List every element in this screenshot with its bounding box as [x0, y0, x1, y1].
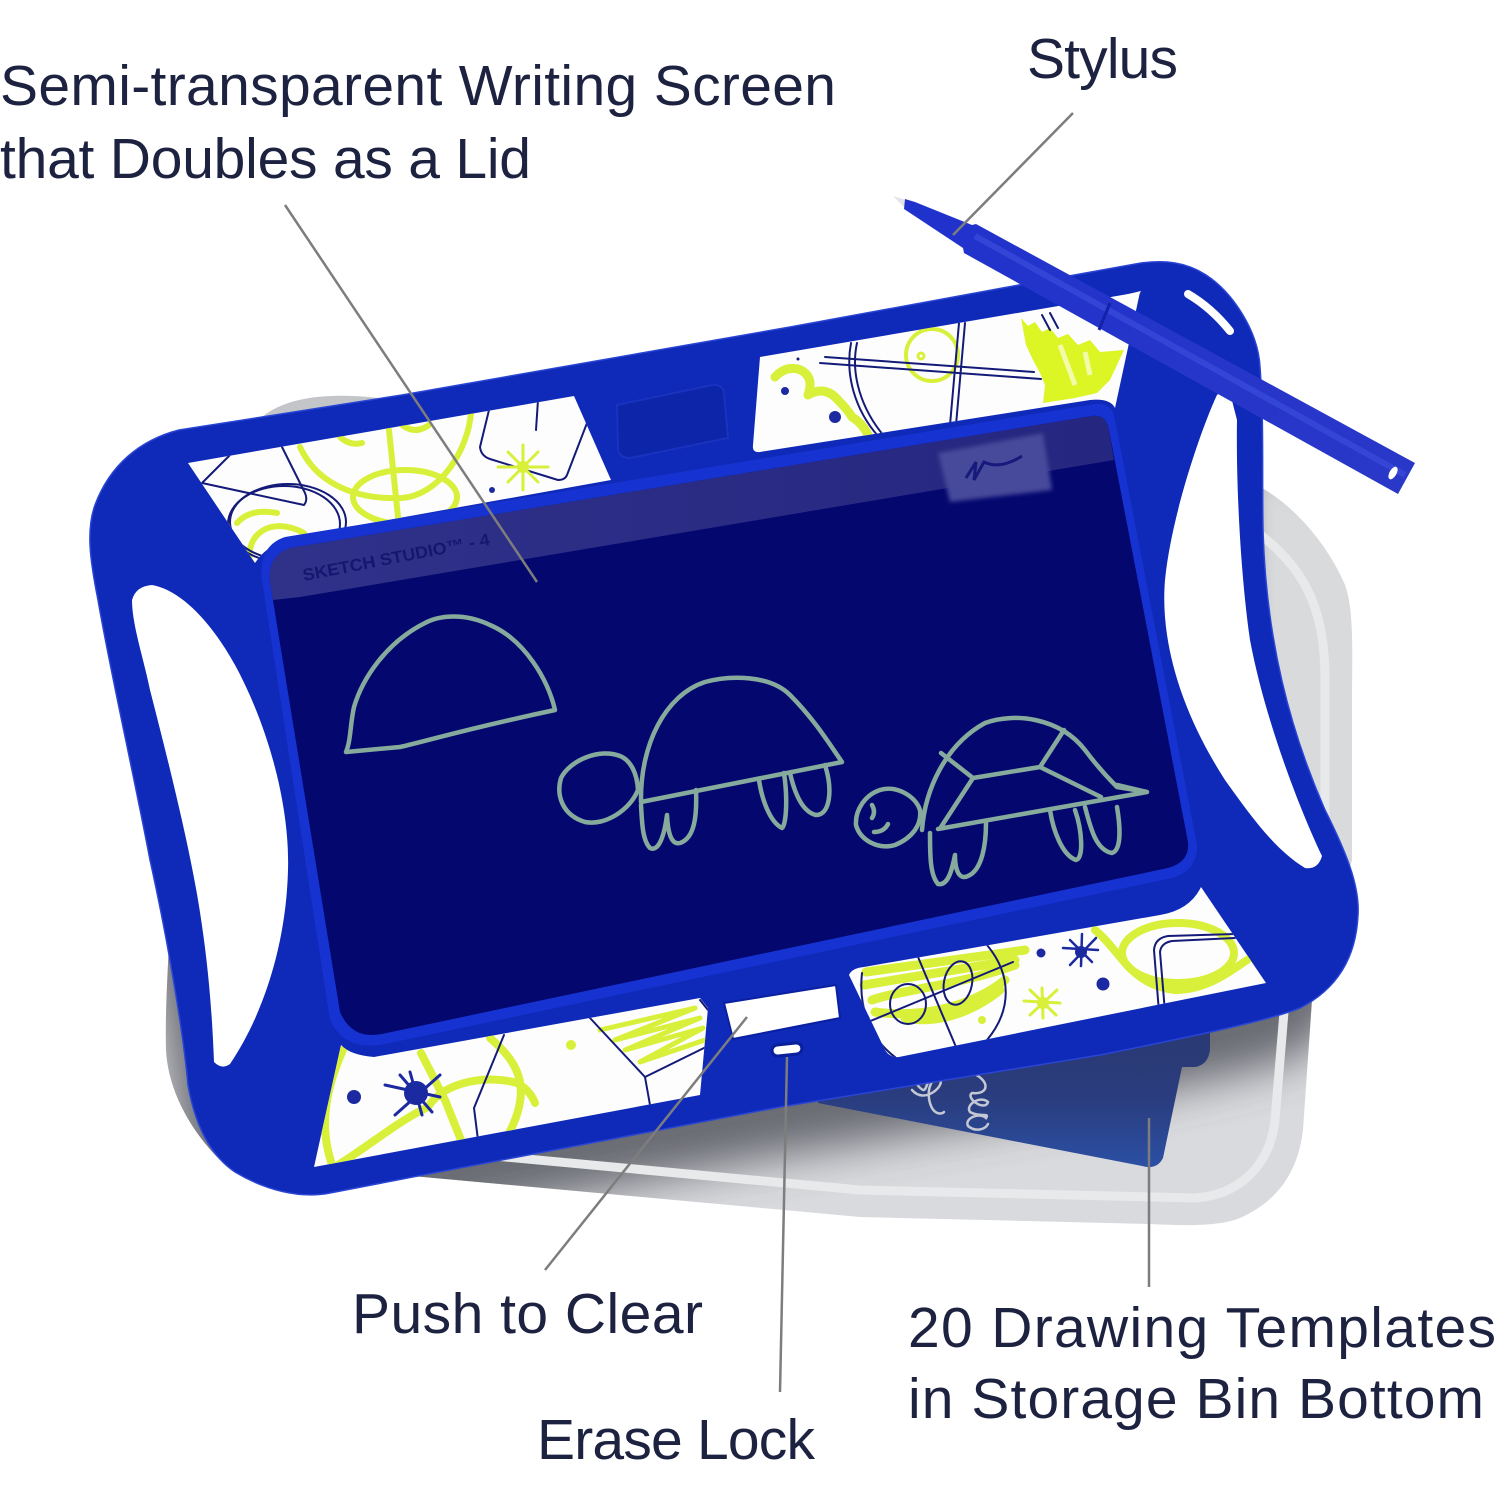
label: push to clear: Push to Clear — [352, 1282, 703, 1346]
panel: top right art — [753, 292, 1140, 452]
leader line: screen — [285, 205, 537, 582]
blue body — [90, 262, 1358, 1195]
erase lock switch — [771, 1042, 802, 1057]
stylus collar — [1099, 303, 1110, 330]
top translucent strip — [270, 416, 1114, 600]
white panel sliver under stylus — [1120, 291, 1141, 312]
turtle drawing 2 — [559, 678, 842, 849]
label: drawing templates: in Storage Bin Bottom — [908, 1367, 1484, 1431]
screen logo scribble — [966, 456, 1022, 480]
left handle cutout — [132, 585, 288, 1067]
stylus tip — [893, 196, 906, 208]
leader line: templates — [1148, 1118, 1150, 1287]
bin top-left edge peeking out — [262, 396, 378, 420]
turtle drawing 1 — [346, 616, 555, 752]
panel: bottom left art — [314, 998, 708, 1170]
label: drawing templates — [908, 1296, 1496, 1431]
product name: SKETCH STUDIO™ - 4 — [301, 530, 492, 585]
leader line: push to clear — [545, 1017, 747, 1270]
hanging slot — [1188, 294, 1230, 331]
turtle drawing 3 — [856, 718, 1147, 884]
screen logo tag — [938, 433, 1052, 502]
label: erase lock: Erase Lock — [537, 1408, 816, 1472]
screen rim — [261, 404, 1197, 1046]
clear button — [724, 985, 840, 1039]
writing screen — [261, 404, 1197, 1046]
panel: bottom right art — [849, 887, 1266, 1057]
stylus barrel — [904, 199, 1415, 494]
label: writing screen — [0, 54, 836, 191]
storage bin — [82, 312, 1370, 1245]
leader line: erase lock — [780, 1057, 787, 1392]
label: stylus: Stylus — [1027, 27, 1178, 91]
label: writing screen: that Doubles as a Lid — [0, 127, 531, 191]
logo emboss — [617, 385, 728, 458]
panel: top left art — [188, 396, 611, 563]
stylus — [893, 196, 1415, 494]
template squiggles — [912, 1073, 988, 1130]
label: drawing templates: 20 Drawing Templates — [908, 1296, 1496, 1360]
label: writing screen: Semi-transparent Writing Screen — [0, 54, 836, 118]
stylus highlight — [975, 236, 1405, 475]
leader line: stylus — [953, 113, 1073, 235]
drawing template card — [818, 1020, 1210, 1167]
stylus hole — [1386, 465, 1400, 481]
screen surface — [270, 416, 1188, 1035]
right handle cutout — [1164, 385, 1322, 868]
tablet frame — [90, 262, 1358, 1195]
